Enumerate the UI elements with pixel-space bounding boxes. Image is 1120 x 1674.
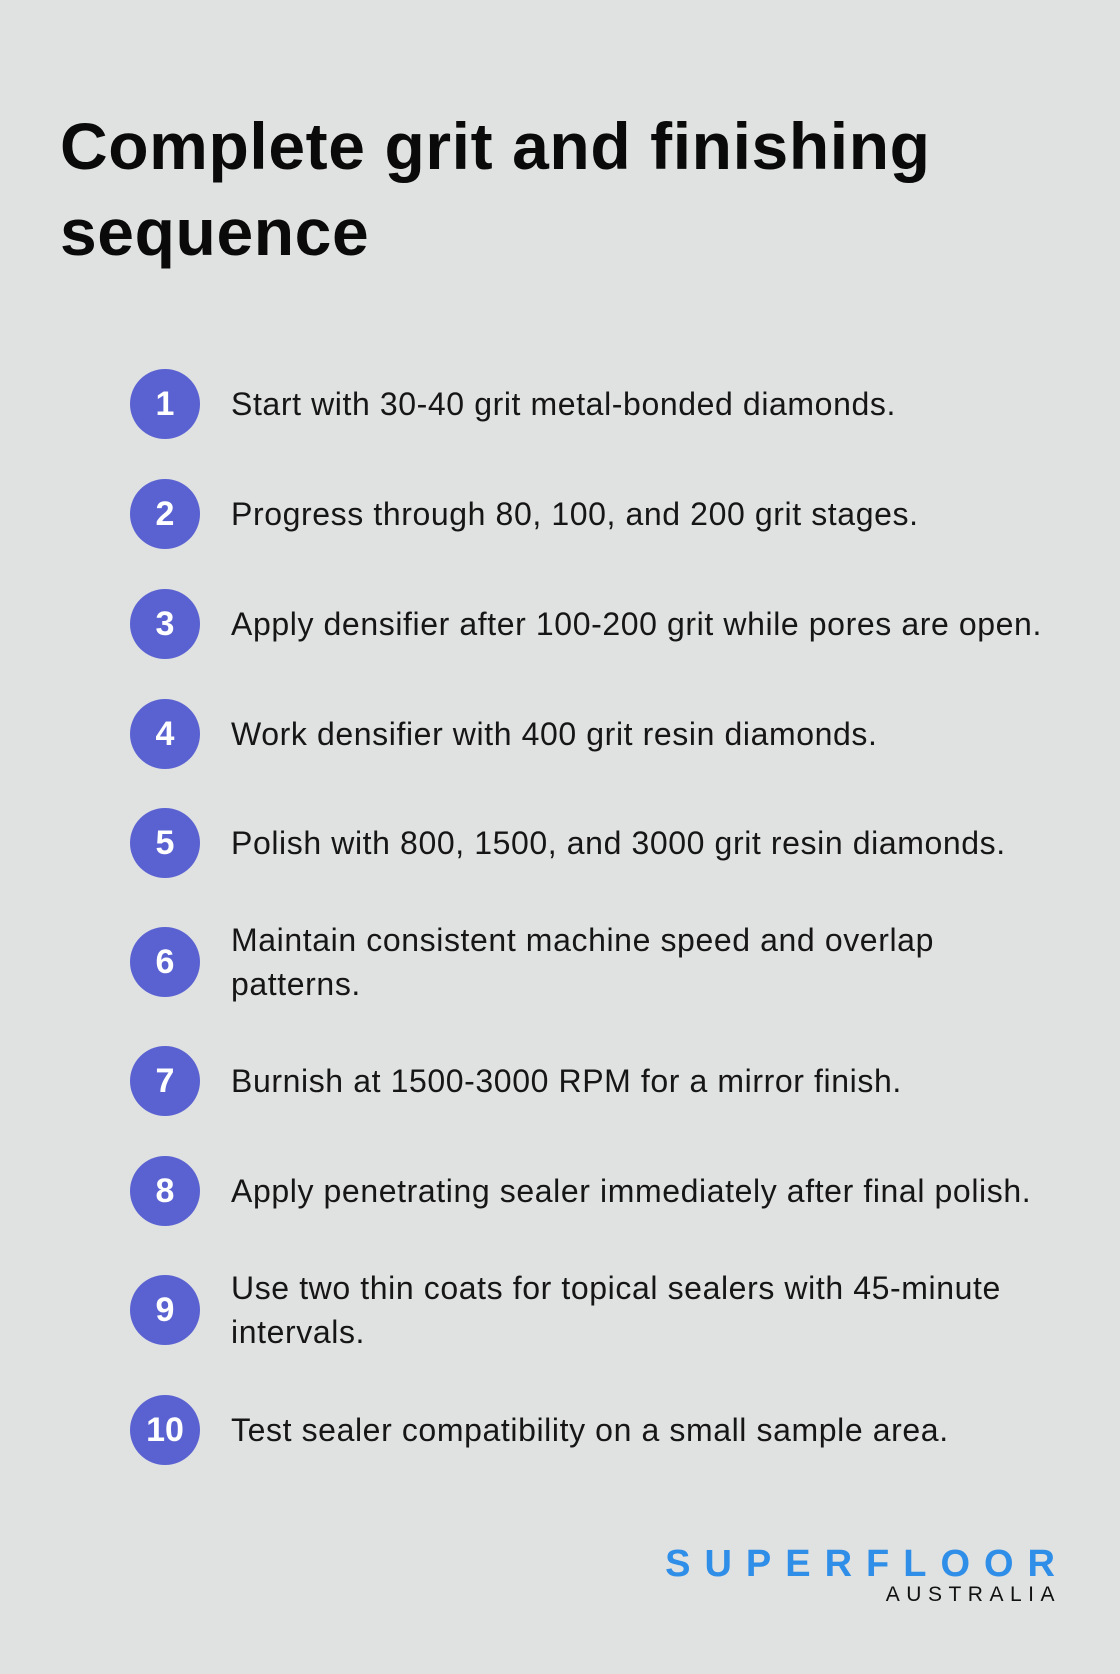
logo: SUPERFLOOR <box>665 1543 1069 1585</box>
logo <box>665 1543 1069 1606</box>
step 4: 4 <box>156 715 174 753</box>
step 9: 9 <box>156 1291 174 1329</box>
step 2 <box>130 479 919 549</box>
title: Complete grit and finishing <box>60 109 931 183</box>
step 1: Start with 30-40 grit metal-bonded diamonds. <box>231 386 896 422</box>
step 1: 1 <box>156 385 174 423</box>
step 2: Progress through 80, 100, and 200 grit stages. <box>231 496 919 532</box>
step 8: Apply penetrating sealer immediately after final polish. <box>231 1173 1031 1209</box>
step 5: 5 <box>156 824 174 862</box>
step 9: Use two thin coats for topical sealers with 45-minute intervals. <box>231 1270 1001 1350</box>
step 2: 2 <box>156 495 174 533</box>
title <box>60 109 931 269</box>
step 6: 6 <box>156 943 174 981</box>
step 10 <box>130 1395 949 1465</box>
title: sequence <box>60 195 369 269</box>
step 7: 7 <box>156 1062 174 1100</box>
step 8 <box>130 1156 1031 1226</box>
step 10: 10 <box>146 1411 184 1449</box>
step 3: 3 <box>156 605 174 643</box>
step 5: Polish with 800, 1500, and 3000 grit resin diamonds. <box>231 825 1006 861</box>
step 1 <box>130 369 896 439</box>
step 3: Apply densifier after 100-200 grit while pores are open. <box>231 606 1042 642</box>
step 7: Burnish at 1500-3000 RPM for a mirror finish. <box>231 1063 902 1099</box>
step 4: Work densifier with 400 grit resin diamonds. <box>231 716 878 752</box>
step 4 <box>130 699 878 769</box>
step 6: Maintain consistent machine speed and overlap patterns. <box>231 922 934 1002</box>
step 5 <box>130 808 1006 878</box>
step 8: 8 <box>156 1172 174 1210</box>
step 10: Test sealer compatibility on a small sample area. <box>231 1412 949 1448</box>
logo: AUSTRALIA <box>886 1583 1061 1606</box>
step 7 <box>130 1046 902 1116</box>
step 3 <box>130 589 1042 659</box>
